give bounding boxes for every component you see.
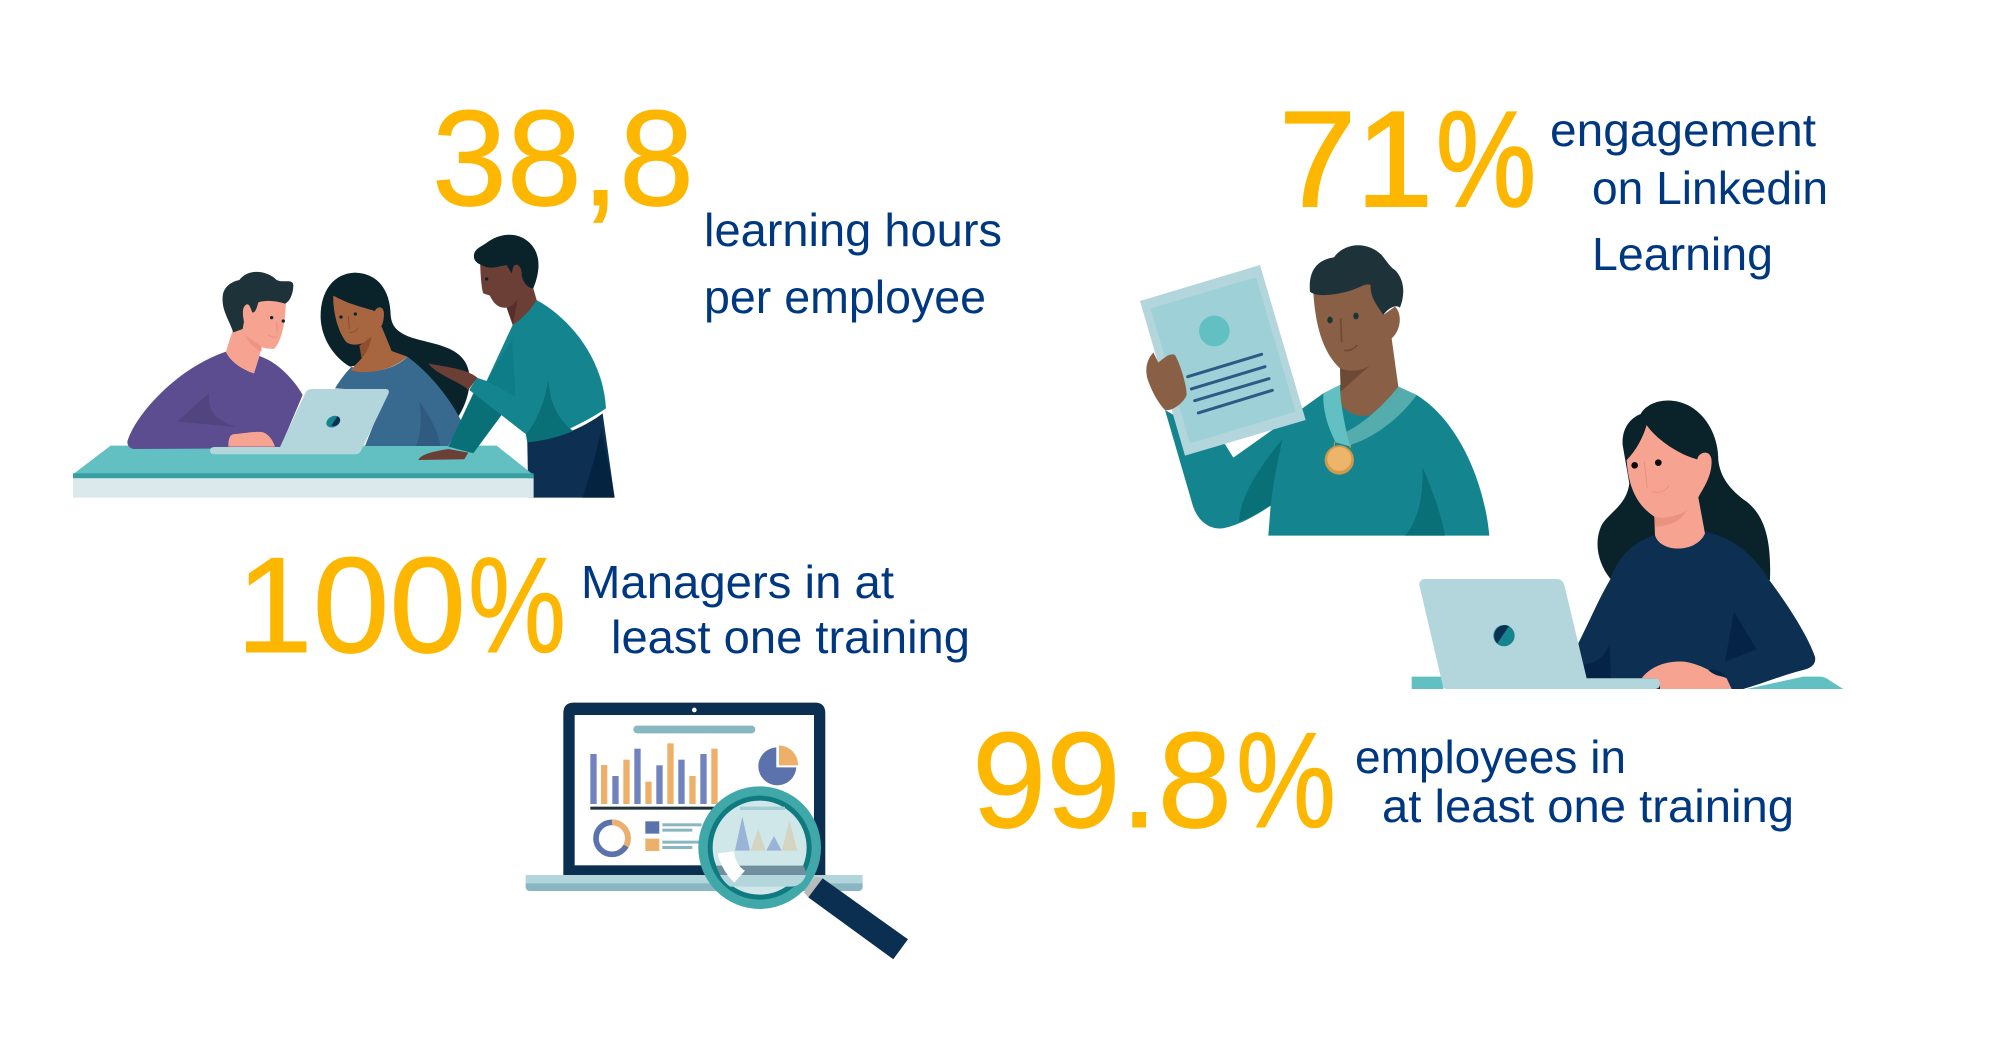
laptop on table [210, 389, 389, 454]
label: on Linkedin: on Linkedin [1592, 162, 1828, 214]
label: least one training: least one training [611, 611, 970, 663]
laptop [1419, 579, 1660, 689]
standing man in teal sweater [418, 235, 606, 460]
label: engagement: engagement [1550, 104, 1816, 156]
illustration: laptop dashboard with magnifying glass [526, 703, 908, 959]
medal and ribbon [1323, 385, 1417, 475]
donut chart [596, 822, 628, 854]
label: at least one training: at least one training [1382, 780, 1794, 832]
stat: 71% number: % [1436, 83, 1536, 235]
chart legend [645, 821, 702, 851]
man in purple sweater [127, 272, 303, 449]
table [73, 446, 534, 498]
table [1412, 677, 1843, 689]
stat: 100% number: % [468, 529, 566, 681]
stat: 99.8% number: % [1236, 704, 1336, 856]
magnifying glass [698, 786, 908, 959]
trousers of standing man [527, 413, 615, 498]
hand holding certificate [1146, 352, 1187, 410]
label: employees in: employees in [1355, 731, 1626, 783]
pie chart [758, 745, 798, 785]
head, neck and hair [1310, 245, 1403, 416]
label: per employee: per employee [704, 271, 986, 323]
illustration: woman at laptop [1412, 401, 1843, 689]
label: Learning: Learning [1592, 228, 1773, 280]
woman in blue sweater [321, 273, 470, 446]
illustration: three colleagues at a laptop [73, 235, 615, 498]
certificate [1140, 265, 1306, 456]
laptop [526, 703, 863, 891]
woman [1578, 401, 1815, 689]
bar chart [590, 743, 718, 810]
label: learning hours: learning hours [704, 204, 1002, 256]
stat: 38,8 number: 38,8 [432, 82, 694, 234]
stat: 100% number: 100 [236, 529, 466, 681]
illustration: man with certificate and medal [1140, 245, 1489, 536]
label: Managers in at: Managers in at [581, 556, 894, 608]
teal sweater [1165, 385, 1489, 536]
stat: 71% number: 71 [1279, 83, 1433, 235]
stat: 99.8% number: 99.8 [972, 704, 1232, 856]
